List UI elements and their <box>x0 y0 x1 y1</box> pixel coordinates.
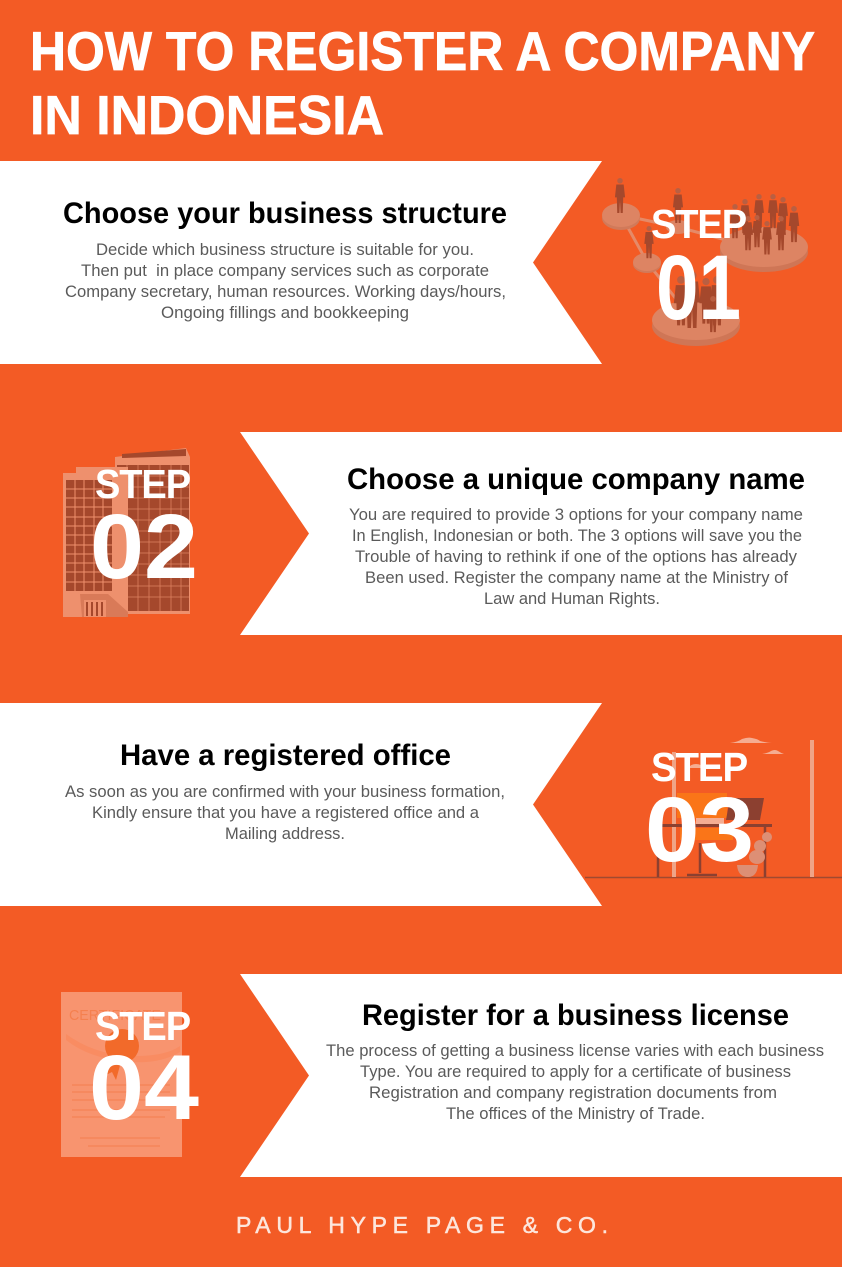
text block: step 4 description: Type. You are required to apply for a certificate of business <box>360 1063 791 1081</box>
text block: step 2 description: Law and Human Rights. <box>484 590 660 608</box>
icon: office desk scene <box>585 738 842 878</box>
icon label: step 01: 01 <box>656 237 741 339</box>
icon label: step 01 <box>651 201 746 339</box>
text block: step 1 description <box>65 241 506 322</box>
icon label: step 03 <box>645 744 754 881</box>
text block: step 2 description: You are required to provide 3 options for your company name <box>349 506 803 524</box>
icon label: step 04 <box>89 1003 199 1139</box>
text block: step 1 description: Then put in place company services such as corporate <box>81 262 489 280</box>
icon label: step 04: 04 <box>89 1037 199 1139</box>
heading: register for a business license: Register for a business license <box>362 999 789 1032</box>
text block: step 1 description: Ongoing fillings and bookkeeping <box>161 304 409 322</box>
text block: step 2 description: In English, Indonesian or both. The 3 options will save you the <box>352 527 802 545</box>
text block: step 1 description: Company secretary, human resources. Working days/hours, <box>65 283 506 301</box>
panel: step 3 band <box>0 703 602 906</box>
icon label: step 02: STEP <box>95 461 190 507</box>
title <box>30 20 815 146</box>
icon label: step 04: STEP <box>95 1003 190 1049</box>
text block: step 2 description <box>349 506 803 608</box>
heading: choose your business structure: Choose your business structure <box>63 197 507 230</box>
icon label: step 01: STEP <box>651 201 746 247</box>
icon label: step 03: 03 <box>645 779 754 881</box>
footer brand name: PAUL HYPE PAGE & CO. <box>236 1212 608 1238</box>
icon: certificate document <box>61 992 182 1157</box>
text block: step 3 description <box>65 783 505 843</box>
text block: step 4 description: The process of getting a business license varies with each business <box>326 1042 824 1060</box>
icon label: step 03: STEP <box>651 744 747 790</box>
icon: office building <box>63 448 190 617</box>
icon: certificate document: CERTIFICATE <box>69 1007 161 1024</box>
heading: choose a unique company name: Choose a unique company name <box>347 463 805 496</box>
panel: step 4 band <box>240 974 842 1177</box>
text block: step 3 description: Mailing address. <box>225 825 345 843</box>
text block: step 2 description: Been used. Register the company name at the Ministry of <box>365 569 788 587</box>
text block: step 4 description: The offices of the Ministry of Trade. <box>446 1105 705 1123</box>
icon: network of business people <box>602 178 808 346</box>
text block: step 4 description <box>326 1042 824 1123</box>
text block: step 1 description: Decide which business structure is suitable for you. <box>96 241 474 259</box>
text block: step 4 description: Registration and company registration documents from <box>369 1084 777 1102</box>
panel: step 2 band <box>240 432 842 635</box>
text block: step 2 description: Trouble of having to rethink if one of the options has already <box>355 548 798 566</box>
icon label: step 02: 02 <box>90 496 198 598</box>
title: IN INDONESIA <box>30 84 384 146</box>
heading: have a registered office: Have a registered office <box>120 739 451 772</box>
text block: step 3 description: As soon as you are confirmed with your business formation, <box>65 783 505 801</box>
text block: step 3 description: Kindly ensure that you have a registered office and a <box>92 804 480 822</box>
panel: step 1 band <box>0 161 602 364</box>
